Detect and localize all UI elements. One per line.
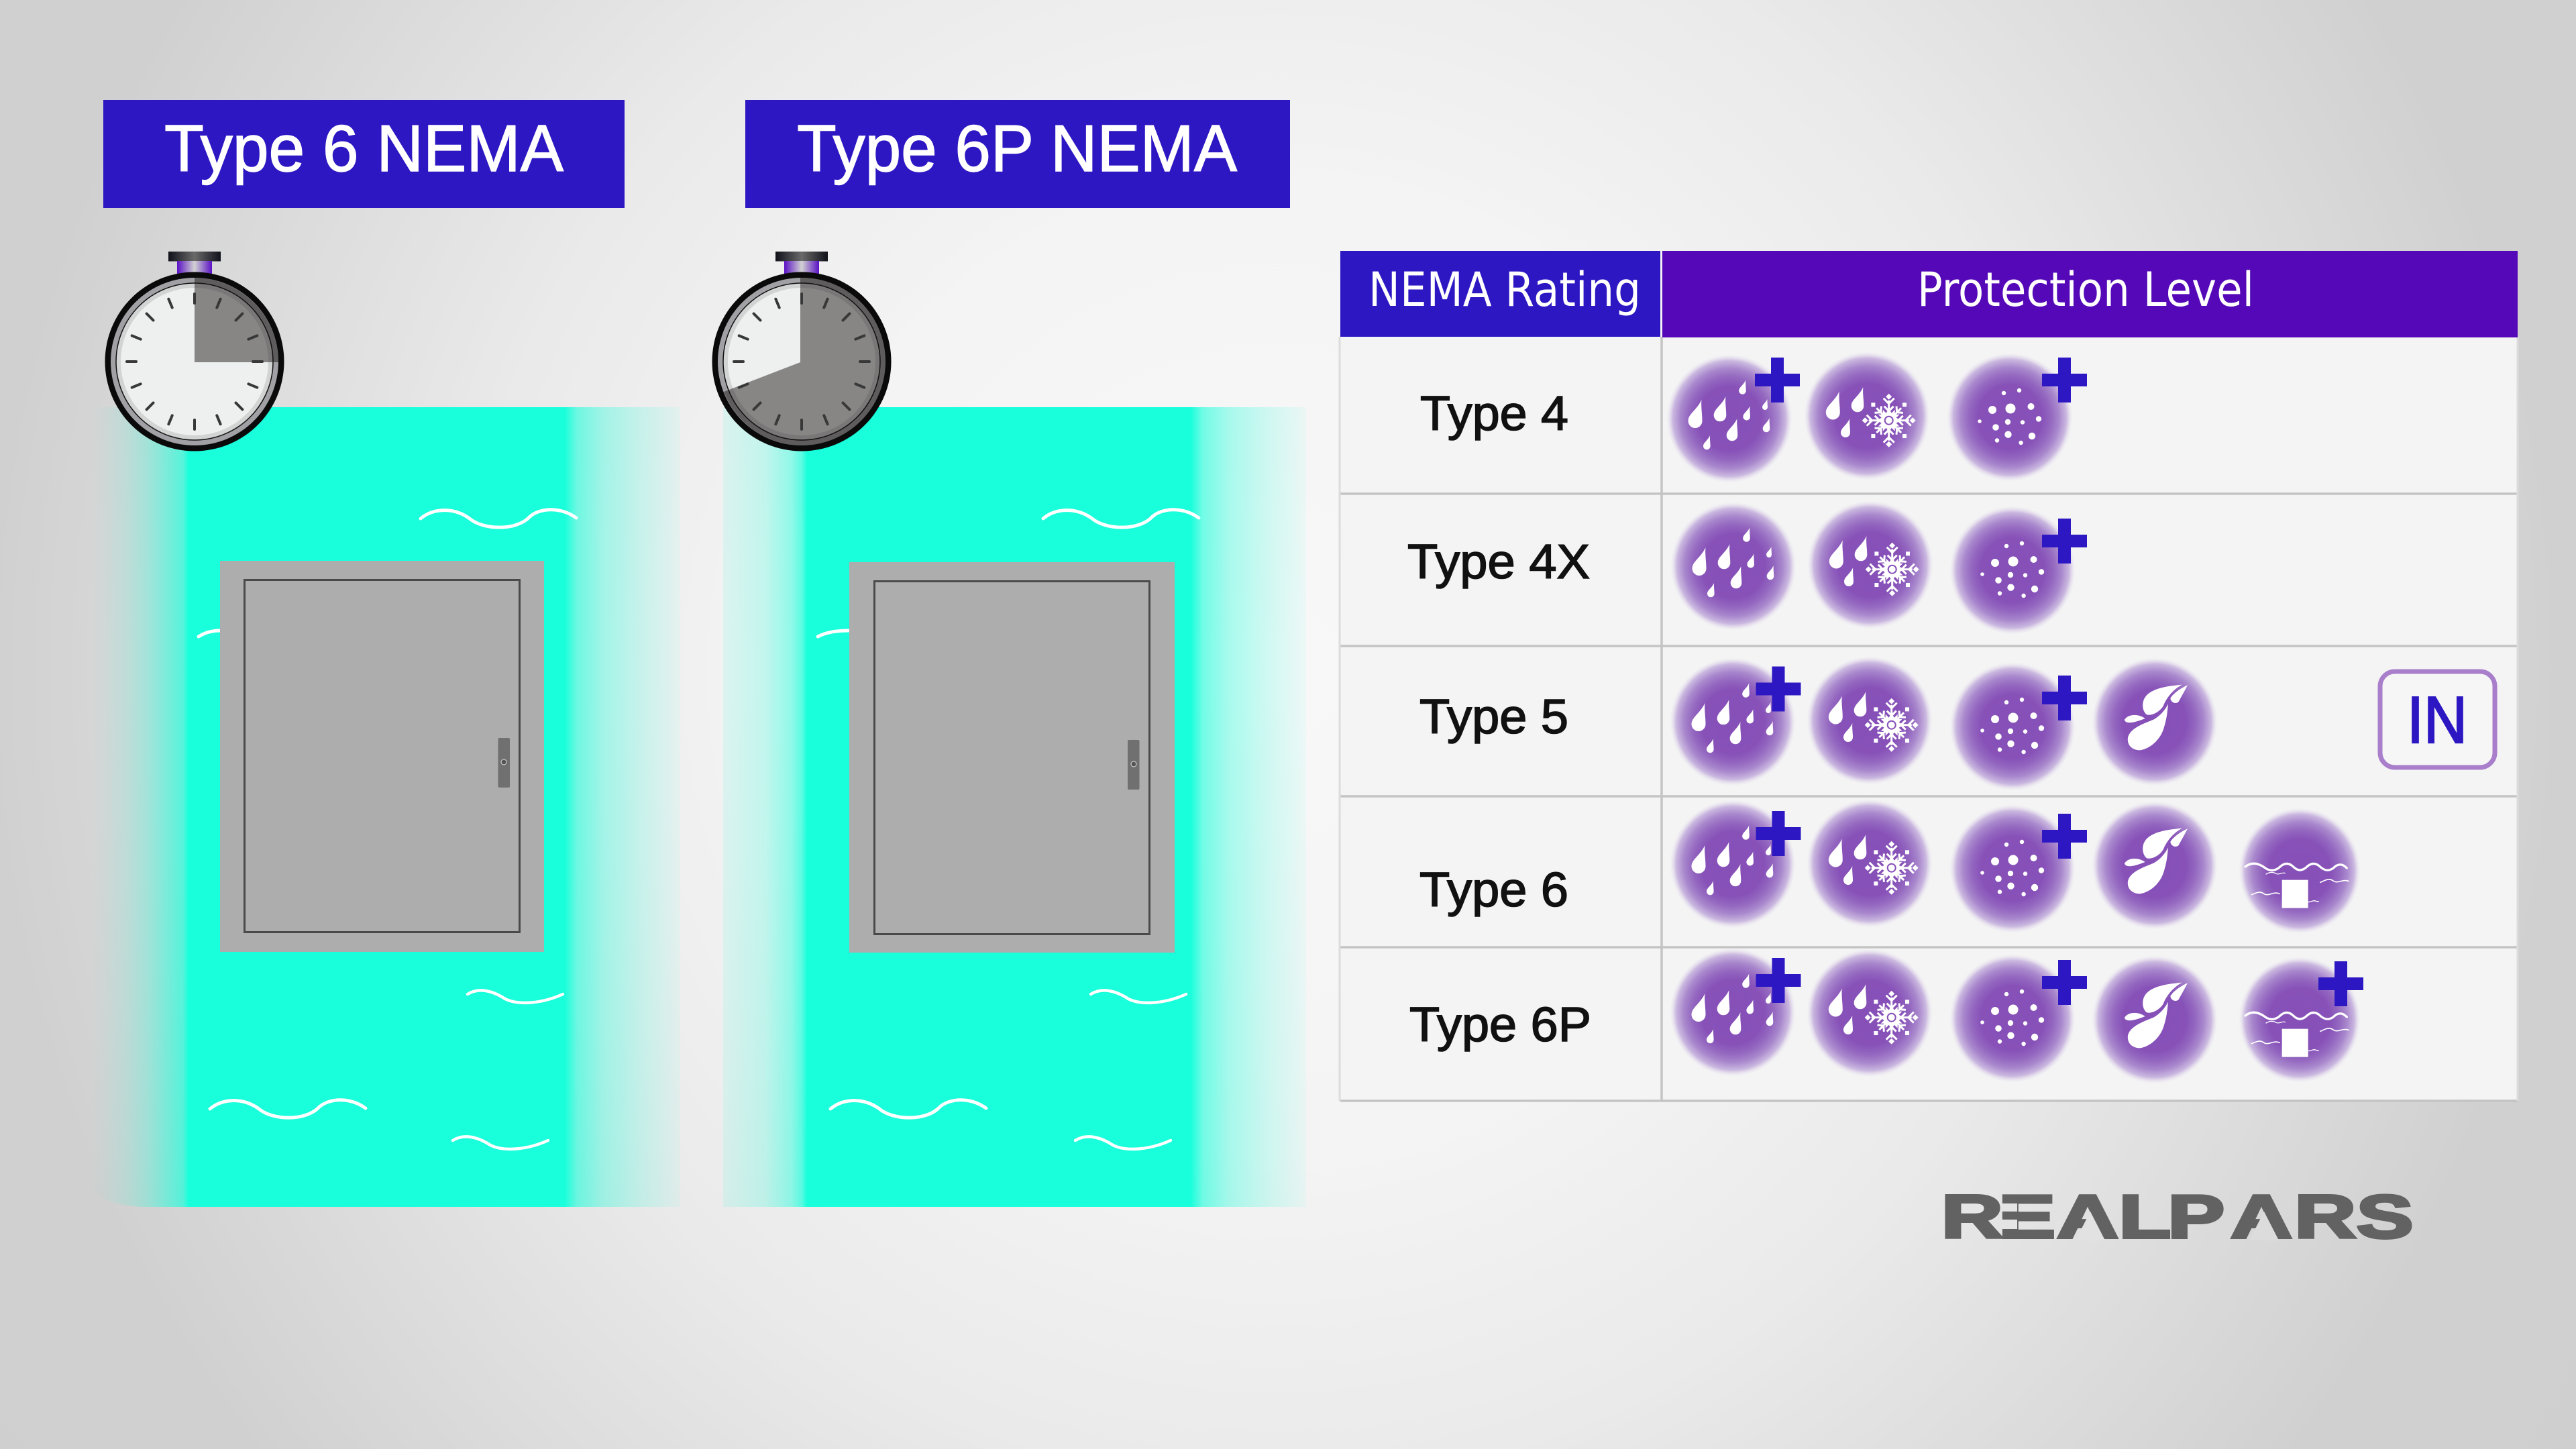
table: NEMA ratings	[1340, 251, 2518, 1101]
row: Type 5: Type 5	[1419, 690, 1568, 744]
badge: IN: IN	[2407, 683, 2467, 757]
table body	[1340, 337, 2518, 1101]
enclosure	[220, 561, 544, 952]
water body	[723, 407, 1306, 1207]
row: Type 6P	[1409, 948, 2363, 1084]
title: Type 6P NEMA	[745, 100, 1290, 208]
header: Protection Level	[1662, 251, 2518, 337]
row: Type 6: Type 6	[1419, 863, 1568, 917]
header: NEMA Rating: NEMA Rating	[1368, 262, 1641, 317]
title: Type 6P NEMA: Type 6P NEMA	[797, 111, 1238, 185]
title: Type 6 NEMA: Type 6 NEMA	[164, 111, 564, 185]
row: Type 5	[1419, 656, 2495, 791]
row: Type 6	[1419, 799, 2361, 934]
icon: stopwatch long elapsed	[712, 252, 891, 451]
row: Type 6P: Type 6P	[1409, 998, 1591, 1052]
icon: stopwatch quarter elapsed	[105, 252, 284, 451]
water waves	[818, 510, 1199, 1149]
panel: Type 6P water immersion	[723, 407, 1306, 1207]
water body	[91, 407, 680, 1207]
badge: IN	[2380, 672, 2495, 767]
title: Type 6 NEMA	[103, 100, 625, 208]
logo: RealPars: REALPARS	[1941, 1183, 2414, 1251]
row: Type 4X: Type 4X	[1407, 535, 1590, 589]
row: Type 4X	[1407, 500, 2087, 635]
header: Protection Level: Protection Level	[1917, 262, 2254, 317]
panel: Type 6 water immersion	[91, 407, 680, 1207]
header: NEMA Rating	[1340, 251, 1660, 337]
row: Type 4: Type 4	[1420, 387, 1568, 441]
row: Type 4	[1420, 352, 2087, 483]
enclosure	[849, 562, 1175, 953]
water waves	[199, 510, 576, 1149]
